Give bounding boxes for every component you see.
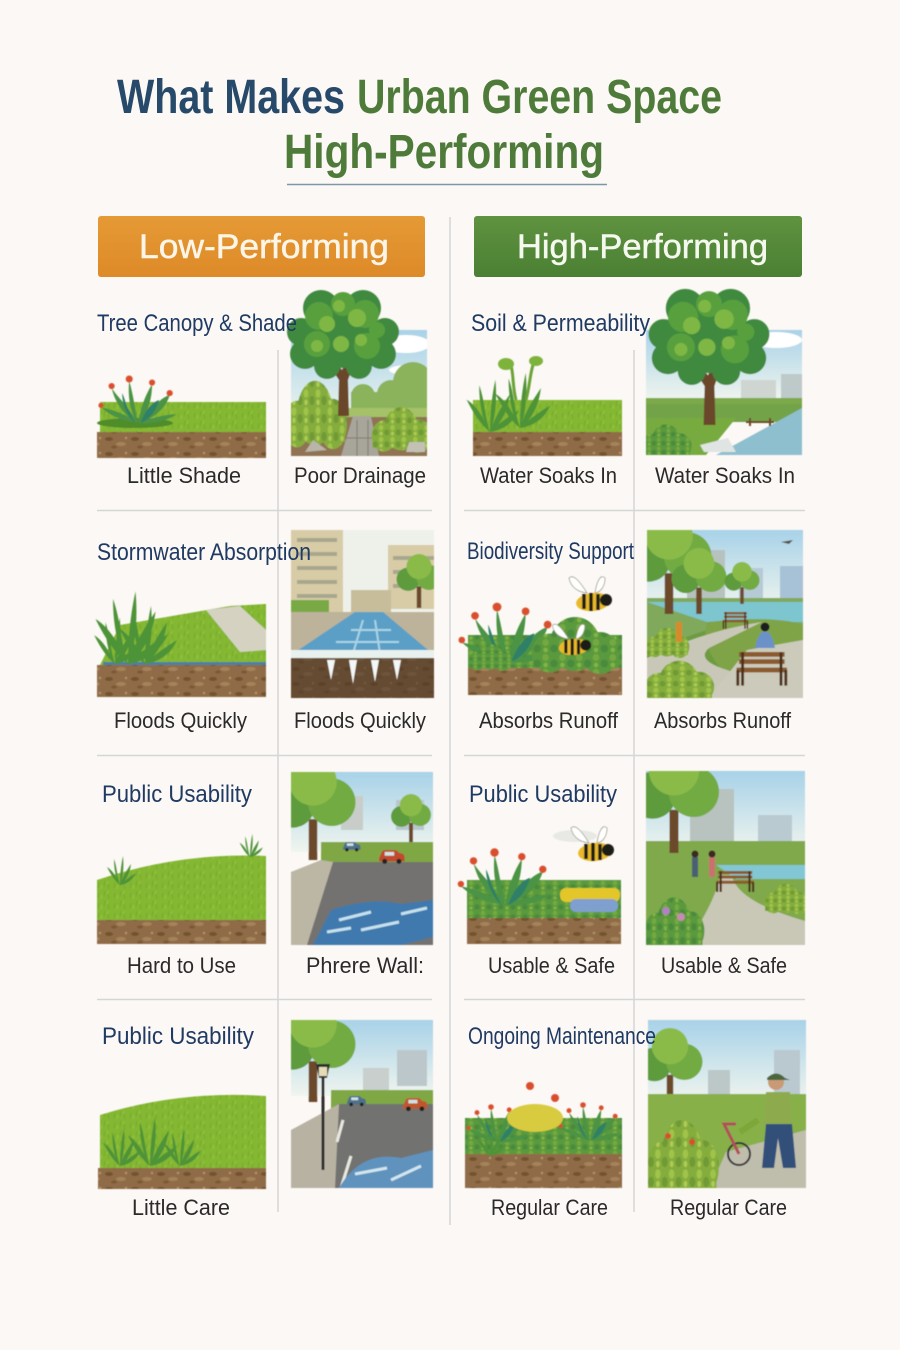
caption: Usable & Safe bbox=[488, 953, 615, 978]
panel: row 2 low soil patch bbox=[94, 592, 266, 697]
caption: Poor Drainage bbox=[294, 463, 426, 488]
caption: Hard to Use bbox=[127, 953, 236, 978]
panel: row 3 high flower and bee patch bbox=[458, 827, 621, 944]
banner: low-performing bbox=[98, 216, 425, 277]
caption: Floods Quickly bbox=[294, 708, 426, 733]
caption: Regular Care bbox=[491, 1195, 608, 1220]
text: row 1 heading low: Tree Canopy & Shade bbox=[97, 310, 297, 337]
panel: row 1 high soil patch bbox=[467, 356, 622, 456]
panel: row 2 low canal picture bbox=[291, 530, 442, 698]
panel: row 3 low grass patch bbox=[97, 834, 266, 944]
panel: row 4 low grass patch bbox=[98, 1095, 266, 1189]
caption: Absorbs Runoff bbox=[654, 708, 792, 733]
caption: Floods Quickly bbox=[114, 708, 247, 733]
text: row 1 heading high: Soil & Permeability bbox=[471, 310, 650, 337]
panel: row 1 low soil patch bbox=[97, 375, 266, 458]
caption: Water Soaks In bbox=[655, 463, 795, 488]
banner: high-performing bbox=[474, 216, 802, 277]
caption: Regular Care bbox=[670, 1195, 787, 1220]
panel: row 4 high worker picture bbox=[638, 1020, 806, 1196]
banner: low-performing: Low-Performing bbox=[139, 228, 389, 266]
panel: row 2 high park picture bbox=[626, 512, 803, 702]
panel: row 4 high flower patch bbox=[465, 1082, 622, 1188]
caption: Absorbs Runoff bbox=[479, 708, 619, 733]
panel: row 3 low road picture bbox=[270, 758, 433, 945]
caption: Little Care bbox=[132, 1195, 230, 1220]
text: row 3 heading high: Public Usability bbox=[469, 781, 617, 808]
panel: row 1 low tree picture bbox=[284, 290, 441, 456]
banner: high-performing: High-Performing bbox=[517, 228, 768, 266]
title: High-Performing bbox=[284, 126, 604, 179]
title: What Makes bbox=[117, 71, 345, 124]
caption: Water Soaks In bbox=[480, 463, 617, 488]
panel: row 3 high park path picture bbox=[629, 745, 808, 951]
text: row 2 heading low: Stormwater Absorption bbox=[97, 539, 311, 566]
panel: row 2 high flower and bee patch bbox=[458, 577, 622, 695]
panel: row 4 low road with lamp picture bbox=[270, 1000, 433, 1188]
caption: Little Shade bbox=[127, 463, 241, 488]
text: row 4 heading low: Public Usability bbox=[102, 1023, 254, 1050]
text: row 3 heading low: Public Usability bbox=[102, 781, 252, 808]
title bbox=[117, 71, 722, 179]
text: row 4 heading high: Ongoing Maintenance bbox=[468, 1023, 656, 1050]
caption: Phrere Wall: bbox=[306, 953, 424, 978]
title: Urban Green Space bbox=[357, 71, 722, 124]
panel: row 1 high tree and pond picture bbox=[641, 289, 802, 459]
caption: Usable & Safe bbox=[661, 953, 787, 978]
text: row 2 heading high: Biodiversity Support bbox=[467, 538, 634, 565]
